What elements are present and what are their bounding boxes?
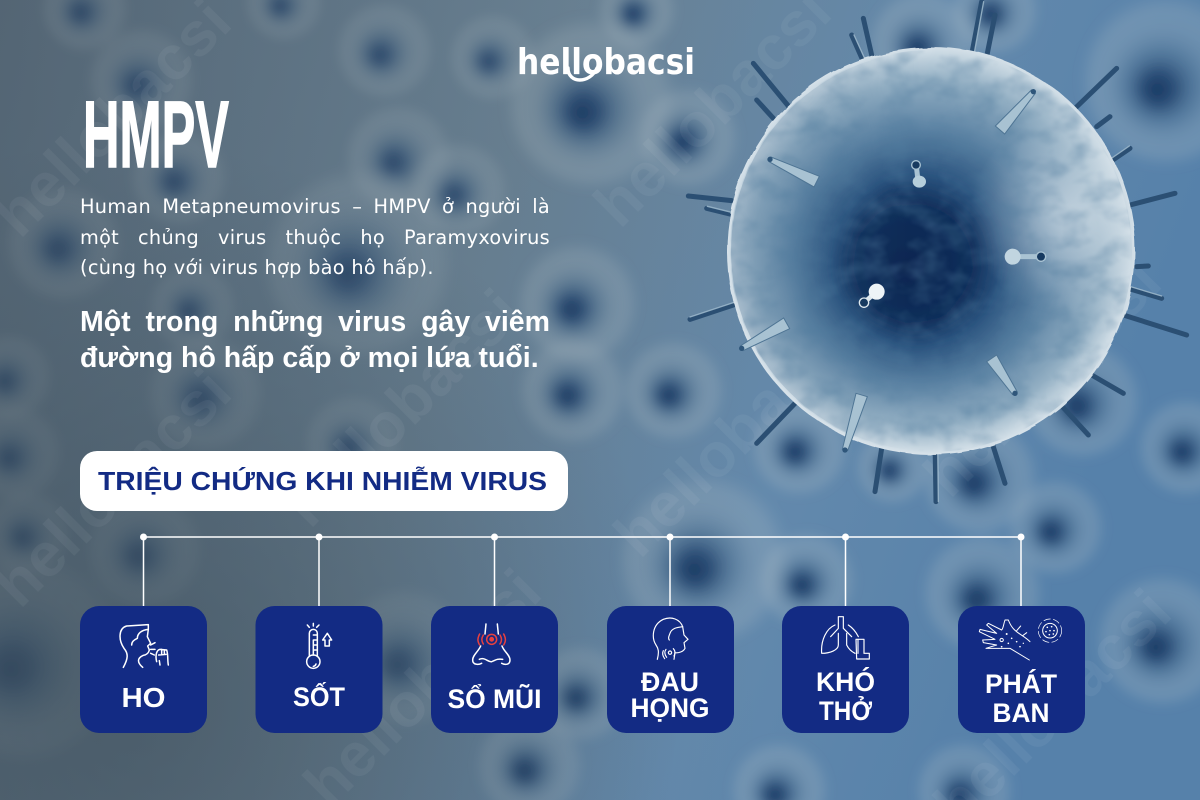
card: rash	[958, 606, 1085, 733]
connector tree	[140, 534, 1024, 606]
card: shortness of breath: KHÓ	[816, 666, 875, 697]
text block: definition of HMPV	[80, 195, 550, 279]
surface spikes	[739, 89, 1046, 453]
icon: nose	[473, 624, 510, 664]
card: sore throat	[607, 606, 734, 733]
card: fever	[256, 606, 382, 733]
text block: key message: đường hô hấp cấp ở mọi lứa tuổi.	[80, 342, 539, 374]
card: cough	[80, 606, 207, 733]
icon: person coughing	[120, 625, 168, 667]
logo: hellobacsi: hellobacsi	[517, 42, 695, 83]
card: shortness of breath: THỞ	[819, 694, 872, 726]
card: fever: SỐT	[293, 680, 345, 712]
heading pill: symptoms	[80, 451, 568, 511]
card: rash: BAN	[992, 698, 1050, 728]
card: sore throat: ĐAU	[641, 667, 699, 697]
title: HMPV: HMPV	[83, 82, 229, 188]
text block: key message	[80, 306, 550, 374]
background: blurred virus cells: hellobacsi	[911, 247, 1174, 510]
rear spikes	[688, 2, 1187, 502]
card: runny nose	[431, 606, 558, 733]
text block: definition of HMPV: (cùng họ với virus hợp bào hô hấp).	[80, 256, 434, 279]
background: blurred virus cells: hellobacsi	[601, 307, 864, 570]
text block: key message: Một trong những virus gây viêm	[80, 306, 550, 338]
card: shortness of breath	[782, 606, 909, 733]
text block: definition of HMPV: một chủng virus thuộc họ Paramyxovirus	[80, 226, 550, 249]
card: rash: PHÁT	[985, 668, 1057, 699]
card: cough: HO	[122, 682, 166, 713]
background: blurred virus cells: hellobacsi	[271, 277, 534, 540]
icon: hand with rash and microbe	[979, 619, 1062, 660]
card: sore throat: HỌNG	[630, 693, 710, 723]
heading pill: symptoms: TRIỆU CHỨNG KHI NHIỄM VIRUS	[98, 466, 547, 496]
icon: lungs and inhaler	[822, 617, 869, 659]
card: runny nose: SỔ MŨI	[448, 683, 542, 714]
icon: head with throat pain	[653, 618, 688, 659]
virus body	[727, 47, 1135, 455]
icon: thermometer	[307, 623, 332, 668]
text block: definition of HMPV: Human Metapneumovirus – HMPV ở người là	[80, 195, 550, 218]
